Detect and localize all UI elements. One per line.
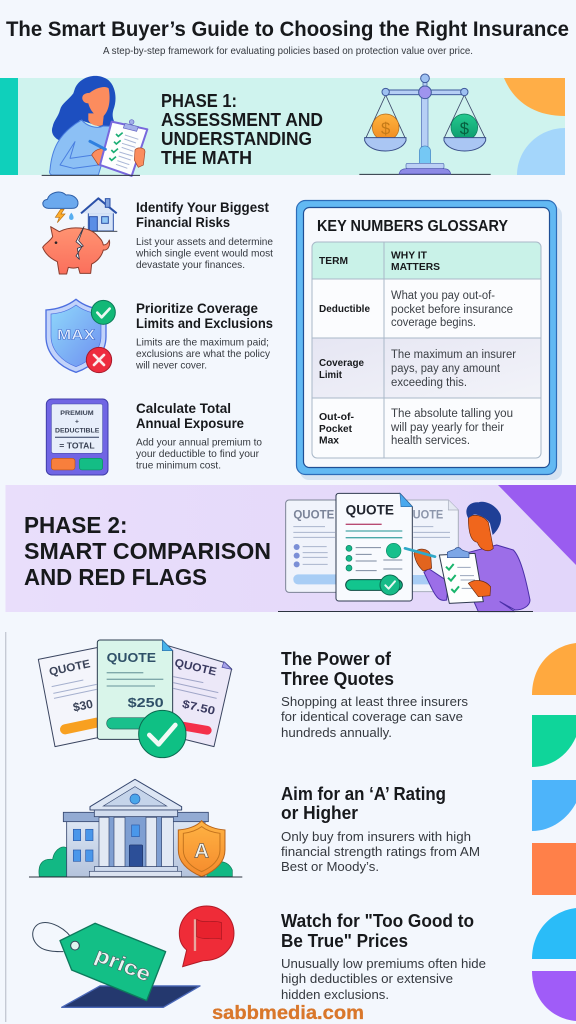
ground line	[278, 612, 533, 625]
heading	[281, 910, 474, 951]
subtitle: A step-by-step framework for evaluating policies based on protection value over price.	[103, 46, 473, 57]
body text: your deductible to find your	[136, 448, 259, 460]
body text: devastate your finances.	[136, 259, 245, 271]
heading: phase 2: PHASE 2:	[24, 512, 128, 538]
icon: three quote cards with check: $7.50	[181, 699, 216, 718]
body text: financial strength ratings from AM	[281, 845, 480, 859]
body text	[281, 957, 486, 1002]
decorative orange corner	[504, 78, 565, 116]
heading: phase 1: PHASE 1:	[161, 91, 237, 111]
step: coverage limits	[46, 299, 273, 373]
body text: Best or Moody’s.	[281, 860, 379, 874]
heading: Be True" Prices	[281, 930, 408, 951]
icon: balance scale with coins: $	[381, 119, 390, 138]
icon: three quote cards with check: QUOTE	[173, 657, 218, 679]
row: out-of-pocket max	[319, 408, 513, 447]
icon: three quote cards with check: $30	[72, 697, 95, 715]
icon: price tag falling into trapdoor with red flag: price	[91, 943, 154, 986]
heading: phase 2	[24, 512, 271, 590]
body text	[281, 830, 480, 874]
decorative blue corner	[517, 128, 565, 175]
icon: bank building with A shield: A	[194, 840, 209, 863]
heading: glossary: KEY NUMBERS GLOSSARY	[317, 218, 508, 235]
body text: Shopping at least three insurers	[281, 695, 468, 709]
row: coverage limit: Limit	[319, 370, 343, 381]
heading: Limits and Exclusions	[136, 316, 273, 331]
heading: Calculate Total	[136, 401, 231, 416]
heading: or Higher	[281, 802, 358, 823]
step: identify risks	[43, 192, 273, 274]
body text: Limits are the maximum paid;	[136, 336, 269, 348]
icon: max shield with check and cross	[46, 299, 115, 373]
heading: phase 1: UNDERSTANDING	[161, 129, 312, 149]
table: glossary terms	[312, 242, 541, 458]
heading	[136, 200, 269, 230]
table header: TERM	[319, 255, 348, 267]
row: coverage limit: The maximum an insurer	[391, 349, 516, 361]
icon: price tag falling into trapdoor with red flag	[33, 906, 234, 1007]
step: the power of three quotes	[38, 640, 468, 758]
icon: quote documents	[286, 493, 458, 601]
heading: Three Quotes	[281, 668, 394, 689]
body text: exclusions are what the policy	[136, 348, 271, 360]
panel: phase 1 steps	[43, 192, 273, 475]
decorative purple corner	[498, 485, 576, 565]
body text	[136, 436, 262, 472]
row: out-of-pocket max: Out-of-	[319, 412, 354, 423]
row: coverage limit: pays, pay any amount	[391, 363, 501, 375]
row: deductible: What you pay out-of-	[391, 290, 495, 302]
row: coverage limit: Coverage	[319, 358, 364, 369]
heading	[136, 301, 273, 331]
body text: Unusually low premiums often hide	[281, 957, 486, 971]
icon: premium plus deductible calculator: PREMIUM	[60, 410, 94, 417]
table header: WHY IT	[391, 250, 428, 262]
icon: bank building with A shield	[29, 779, 242, 877]
icon: storm, house and broken piggy bank	[43, 192, 117, 274]
step: aim for an A rating	[29, 779, 480, 877]
row: coverage limit: exceeding this.	[391, 377, 467, 389]
heading: Prioritize Coverage	[136, 301, 258, 316]
divider: phase 2 rule	[5, 632, 7, 1022]
icon: three quote cards with check: QUOTE	[107, 651, 156, 665]
row: out-of-pocket max: health services.	[391, 435, 470, 447]
row: out-of-pocket max: Max	[319, 436, 339, 446]
row: out-of-pocket max: Pocket	[319, 424, 353, 435]
icon: three quote cards with check: $250	[128, 696, 164, 710]
row: deductible	[319, 290, 513, 329]
row: out-of-pocket max: will pay yearly for their	[390, 422, 504, 434]
body text: hidden exclusions.	[281, 988, 389, 1002]
row: deductible: coverage begins.	[391, 317, 476, 329]
heading: The Power of	[281, 648, 392, 669]
row: out-of-pocket max: The absolute talling you	[391, 408, 513, 420]
icon: three quote cards with check	[38, 640, 232, 758]
body text: Add your annual premium to	[136, 436, 262, 448]
decorative right-edge shapes	[532, 643, 576, 1021]
heading: Annual Exposure	[136, 416, 244, 431]
watermark: sabbmedia.com	[212, 1003, 364, 1024]
heading	[136, 401, 244, 431]
icon: premium plus deductible calculator: +	[75, 419, 79, 426]
panel: phase 1 banner	[0, 74, 565, 176]
icon: premium plus deductible calculator: DEDUCTIBLE	[55, 428, 99, 435]
icon: woman with clipboard	[42, 76, 147, 176]
icon: premium plus deductible calculator	[46, 399, 108, 475]
body text	[135, 236, 273, 271]
body text: Only buy from insurers with high	[281, 830, 471, 844]
body text	[281, 695, 468, 740]
body text: will never cover.	[135, 360, 207, 372]
body text: hundreds annually.	[281, 726, 392, 740]
panel: key numbers glossary	[296, 200, 562, 480]
heading: phase 1: THE MATH	[161, 148, 252, 168]
heading	[281, 648, 394, 689]
heading: Financial Risks	[136, 215, 230, 230]
table header: MATTERS	[391, 261, 440, 273]
heading	[281, 783, 446, 823]
body text: for identical coverage can save	[281, 710, 463, 724]
heading: phase 1	[161, 91, 323, 168]
heading: phase 2: AND RED FLAGS	[24, 564, 207, 590]
icon: max shield with check and cross: MAX	[57, 327, 95, 344]
icon: balance scale with coins: $	[460, 119, 469, 138]
icon: premium plus deductible calculator: = TOTAL	[59, 441, 95, 450]
icon: quote documents: UOTE	[413, 508, 444, 521]
step: annual exposure	[46, 399, 262, 475]
body text: which single event would most	[135, 248, 273, 260]
row: deductible: pocket before insurance	[391, 304, 513, 316]
body text: high deductibles or extensive	[281, 972, 453, 986]
heading: phase 2: SMART COMPARISON	[24, 538, 271, 564]
panel: phase 2 banner	[6, 485, 576, 625]
step: too good to be true	[33, 906, 486, 1007]
heading: phase 1: ASSESSMENT AND	[161, 110, 323, 130]
table header	[319, 250, 440, 273]
heading: Aim for an ‘A’ Rating	[281, 783, 446, 804]
body text: true minimum cost.	[136, 460, 221, 472]
heading: Identify Your Biggest	[136, 200, 269, 215]
icon: balance scale with coins	[359, 74, 491, 174]
icon: quote documents: QUOTE	[346, 502, 394, 517]
icon: quote documents: QUOTE	[293, 508, 335, 521]
body text	[135, 336, 271, 372]
body text: List your assets and determine	[136, 236, 273, 248]
heading: Watch for "Too Good to	[281, 910, 474, 931]
row: coverage limit	[319, 349, 516, 389]
icon: three quote cards with check: QUOTE	[48, 658, 92, 679]
row: deductible: Deductible	[319, 304, 370, 315]
icon: man with clipboard and pen	[405, 502, 530, 612]
